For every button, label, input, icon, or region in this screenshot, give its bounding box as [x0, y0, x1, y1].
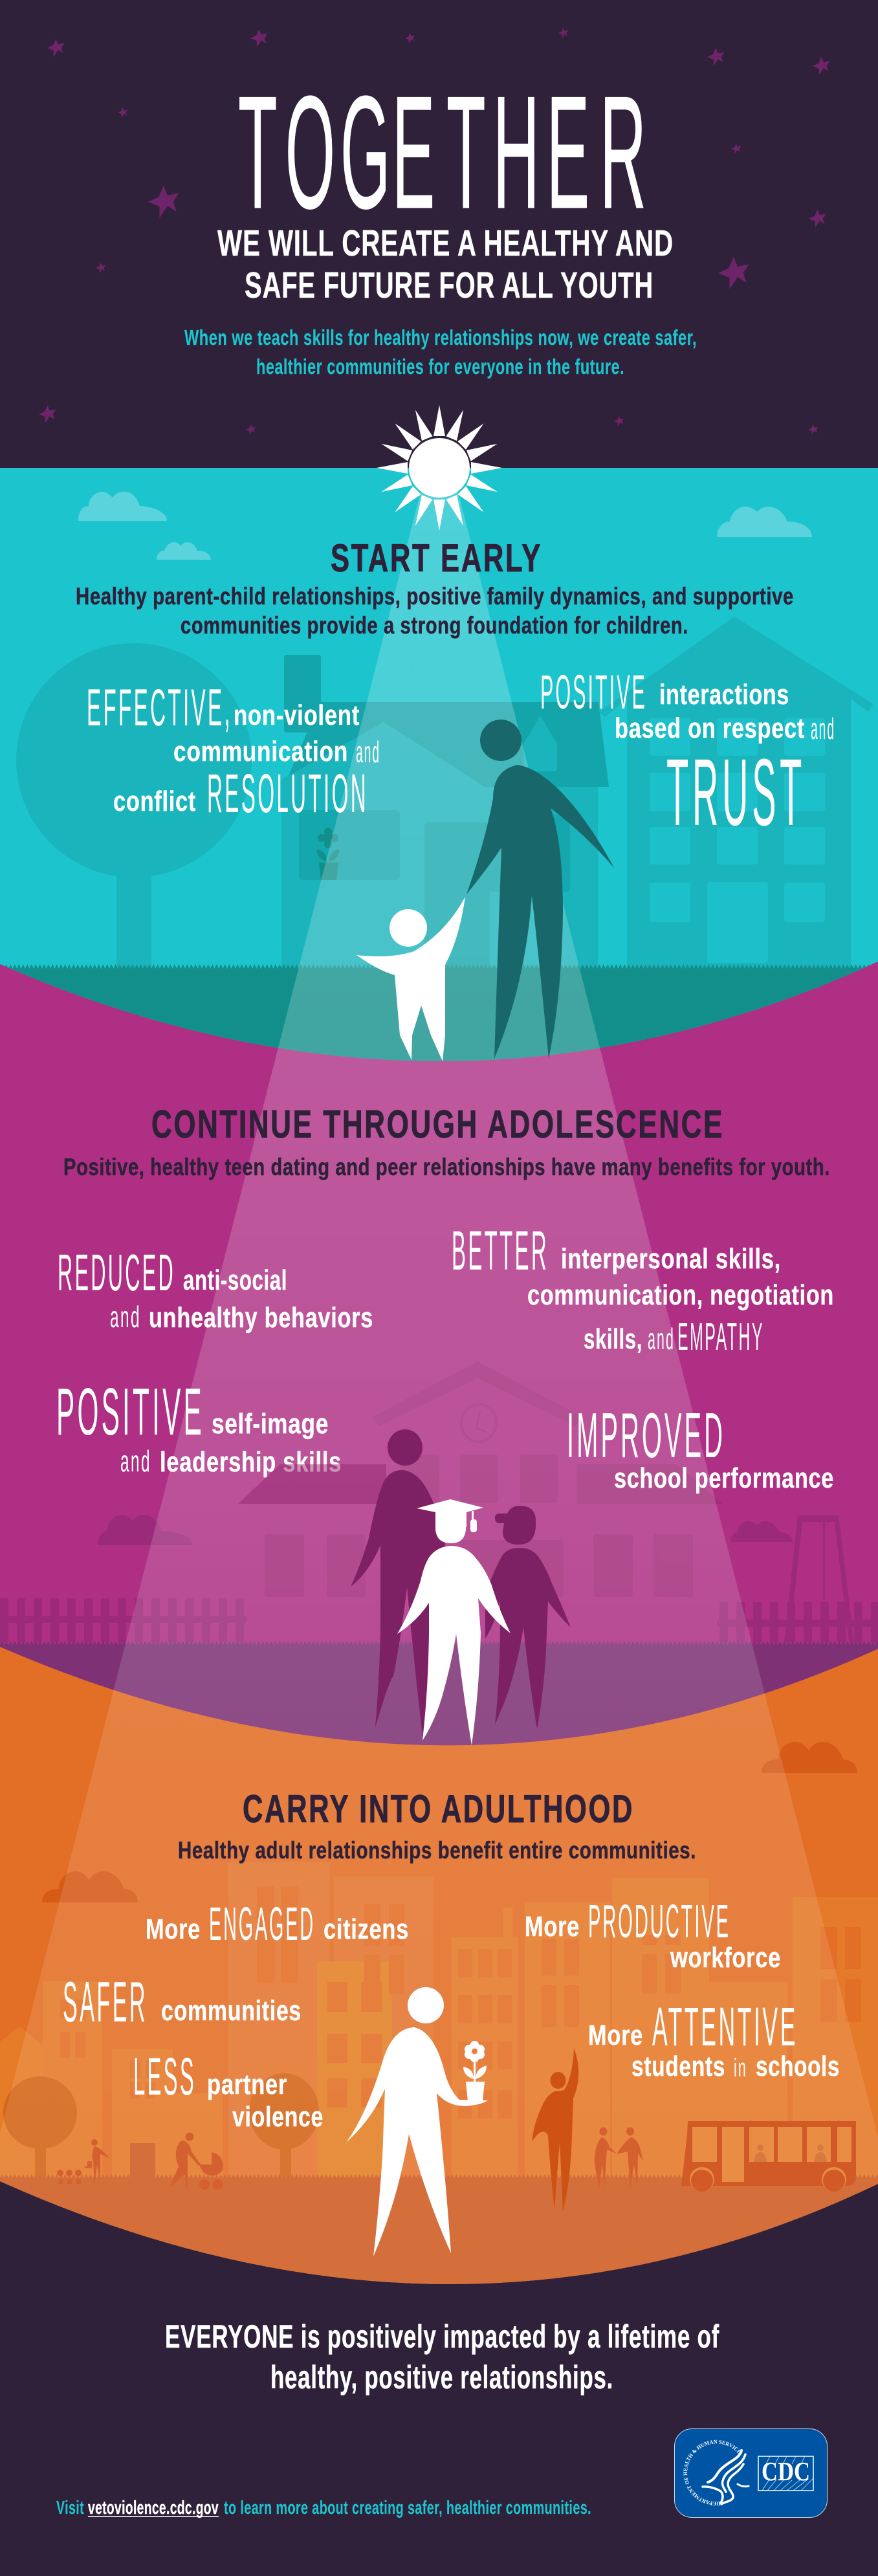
figure: graduate [397, 1499, 510, 1745]
text: positive interactions: POSITIVE [540, 665, 647, 719]
heading: carry into adulthood: CARRY INTO ADULTHOOD [243, 1787, 634, 1831]
panel: teal early childhood background [0, 468, 878, 1061]
footer link text: to learn more about creating safer, healthier communities. [224, 2498, 591, 2518]
text: attentive students: in [734, 2054, 747, 2082]
text: positive self-image: POSITIVE [56, 1374, 204, 1449]
flower in window [317, 828, 339, 880]
text: reduced behaviors [58, 1244, 373, 1334]
text: better skills: BETTER [452, 1220, 549, 1282]
icon: sun [377, 405, 502, 531]
heading: start early: START EARLY [331, 536, 542, 580]
text: positive self-image [56, 1374, 342, 1478]
text: productive workforce: workforce [670, 1942, 781, 1974]
figure: couple holding hands [595, 2128, 643, 2188]
subtitle: SAFE FUTURE FOR ALL YOUTH [245, 265, 653, 306]
text: positive self-image: leadership skills [160, 1446, 342, 1478]
text: improved performance [567, 1400, 834, 1494]
text: better skills: EMPATHY [677, 1316, 764, 1358]
text: reduced behaviors: anti-social [183, 1264, 287, 1296]
panel: purple adolescence background [0, 906, 878, 1745]
text block: start early description: communities provide a strong foundation for children. [181, 612, 688, 639]
text: safer communities: SAFER [63, 1970, 148, 2034]
figure: left teen [351, 1429, 446, 1736]
text: safer communities: communities [161, 1995, 302, 2027]
text block: start early description [76, 583, 794, 639]
text: productive workforce: More [525, 1911, 580, 1943]
footer link text [56, 2498, 591, 2518]
figure: parent [466, 720, 614, 1059]
figure: person with stroller [170, 2133, 223, 2190]
text: engaged citizens: ENGAGED [209, 1899, 315, 1950]
text: positive interactions [540, 665, 835, 846]
closing statement: healthy, positive relationships. [270, 2359, 613, 2395]
figure: gardener with flowers [57, 2139, 110, 2186]
text: productive workforce [525, 1896, 781, 1974]
intro text [184, 325, 697, 379]
text: better skills: skills, [584, 1323, 642, 1355]
text: reduced behaviors: and [110, 1300, 141, 1334]
figure: adult holding flower [346, 1987, 488, 2256]
closing statement [165, 2318, 719, 2395]
text: less partner violence [133, 2047, 324, 2133]
icon: bus [681, 2121, 856, 2192]
footer link text: vetoviolence.cdc.gov [88, 2498, 219, 2518]
figure: man raising arm [532, 2048, 578, 2212]
subtitle [217, 223, 674, 306]
text: attentive students: students [631, 2051, 725, 2082]
neighborhood scene: early childhood [0, 492, 878, 1072]
text: positive interactions: based on respect [615, 712, 805, 744]
clouds [78, 492, 812, 560]
text: effective communication: non-violent [234, 699, 360, 731]
stars [39, 28, 830, 435]
text: reduced behaviors: unhealthy behaviors [149, 1302, 373, 1334]
text: less partner violence: partner [207, 2069, 287, 2100]
light beam [0, 482, 878, 2310]
text: effective communication: conflict [113, 786, 196, 817]
text: less partner violence: LESS [133, 2047, 196, 2106]
text: better skills: interpersonal skills, [561, 1243, 781, 1275]
panel: orange adulthood background [0, 1553, 878, 2284]
text: effective communication: EFFECTIVE, [87, 679, 232, 737]
text: attentive students: More [588, 2020, 643, 2051]
figure: right teen with cap [485, 1506, 571, 1729]
text: RESOLUTION [207, 763, 368, 824]
text: engaged citizens: More [146, 1913, 201, 1945]
title: TOGETHER [238, 63, 646, 243]
text: effective communication [87, 679, 380, 824]
logo: CDC and HHS: DEPARTMENT OF HEALTH & HUMAN SERVICES · USA [683, 2439, 740, 2505]
text: engaged citizens [146, 1899, 409, 1950]
text: and [811, 712, 835, 745]
text block: adulthood description: Healthy adult relationships benefit entire communities. [178, 1837, 696, 1864]
text: effective communication: communication [173, 736, 348, 767]
text: reduced behaviors: REDUCED [58, 1244, 175, 1301]
school scene: adolescence [0, 1361, 878, 1761]
text: better skills: and [648, 1322, 675, 1356]
text: better skills [452, 1220, 834, 1358]
intro text: healthier communities for everyone in the future. [256, 355, 624, 379]
text: positive self-image: self-image [212, 1408, 329, 1440]
text: attentive students: schools [756, 2051, 840, 2082]
text: positive self-image: and [120, 1444, 151, 1478]
text: engaged citizens: citizens [324, 1913, 409, 1945]
text: positive interactions: interactions [659, 679, 789, 710]
text: less partner violence: violence [232, 2101, 324, 2133]
subtitle: WE WILL CREATE A HEALTHY AND [217, 223, 674, 264]
text: and [356, 735, 380, 769]
footer link text: Visit [56, 2498, 84, 2518]
school left wing roof [238, 1464, 386, 1504]
figure: child [357, 897, 465, 1061]
text: attentive students [588, 1996, 840, 2082]
city scene: adulthood [0, 1742, 878, 2304]
logo: CDC and HHS: CDC [762, 2456, 810, 2486]
